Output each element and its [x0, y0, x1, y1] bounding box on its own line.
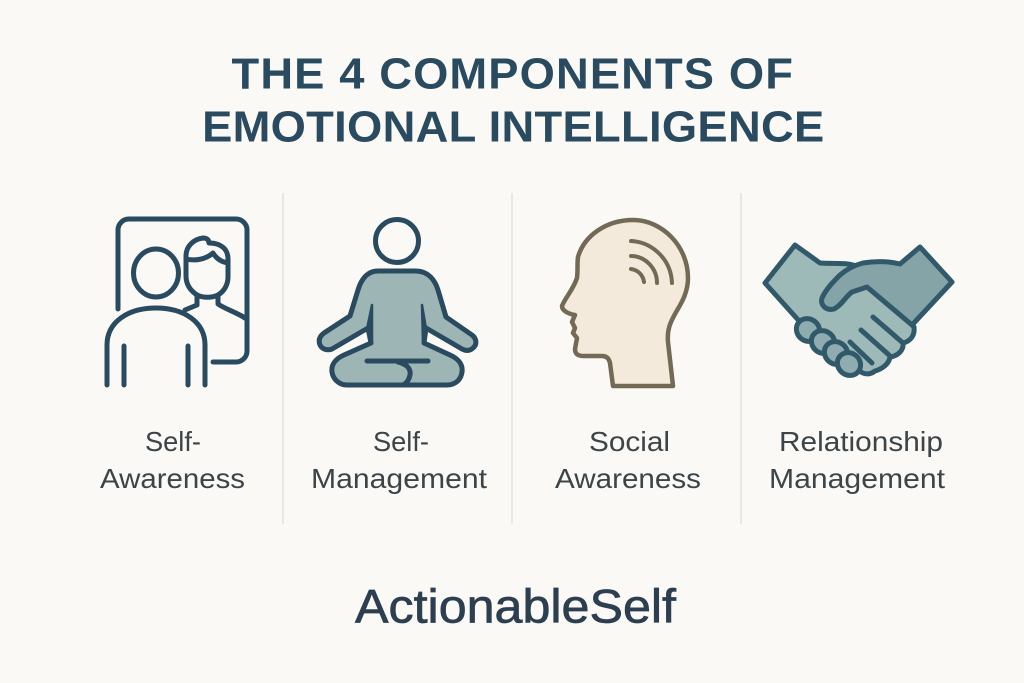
title	[202, 50, 824, 151]
icon: handshake	[765, 245, 952, 380]
icon: person facing mirror	[107, 219, 247, 385]
label: social awareness	[555, 426, 701, 494]
icon: meditating person	[319, 220, 476, 385]
brand name: ActionableSelf	[355, 580, 677, 632]
label: relationship management: Management	[769, 463, 945, 494]
label: self-management	[311, 426, 487, 494]
label: self-awareness: Self-	[145, 426, 201, 457]
label: self-awareness	[100, 426, 245, 494]
label: self-management: Self-	[373, 426, 429, 457]
label: self-awareness: Awareness	[100, 463, 245, 494]
title: EMOTIONAL INTELLIGENCE	[202, 103, 824, 151]
label: self-management: Management	[311, 463, 487, 494]
label: social awareness: Social	[589, 426, 670, 457]
label: relationship management: Relationship	[779, 426, 943, 457]
title: THE 4 COMPONENTS OF	[232, 50, 793, 98]
icon: head with signal waves	[562, 220, 688, 386]
label: social awareness: Awareness	[555, 463, 701, 494]
label: relationship management	[769, 426, 945, 494]
